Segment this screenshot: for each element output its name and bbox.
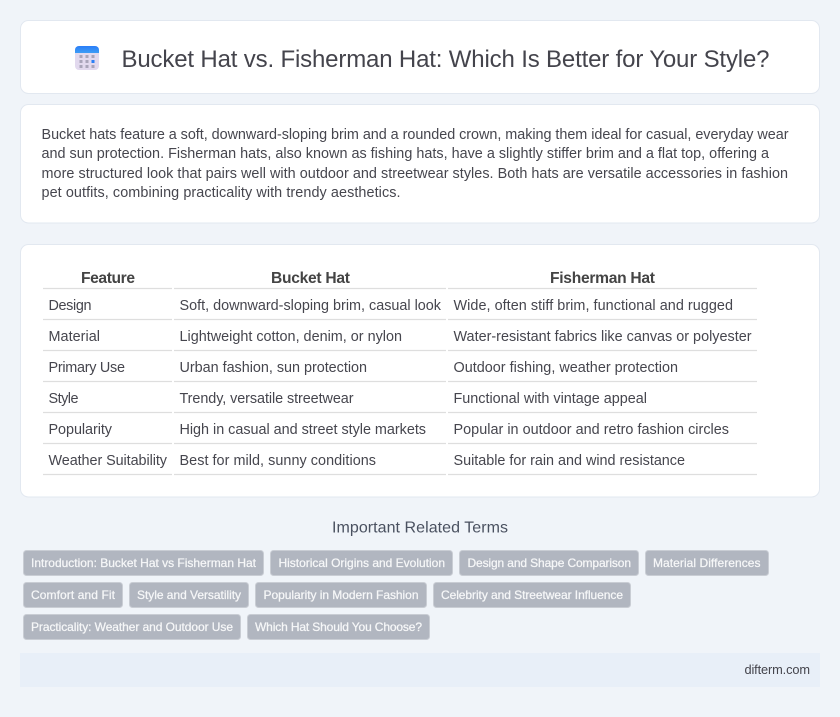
footer [20, 653, 820, 687]
footer site name: difterm.com [744, 662, 810, 677]
tag: style and versatility [130, 582, 248, 608]
panel: comparison table [20, 244, 820, 497]
tag: which hat [248, 614, 430, 640]
tag: popularity in modern fashion: Popularity in Modern Fashion [264, 588, 418, 602]
tag: design and shape: Design and Shape Comparison [468, 556, 631, 570]
tag: celebrity and streetwear [434, 582, 630, 608]
row: primary use: Outdoor fishing, weather protection [454, 360, 678, 376]
row: material [48, 329, 752, 345]
table header: Feature [81, 270, 135, 287]
related terms heading: Important Related Terms [332, 520, 508, 536]
row: style: Style [48, 391, 78, 407]
row: primary use: Primary Use [48, 360, 125, 376]
header panel [20, 20, 820, 94]
title: Bucket Hat vs. Fisherman Hat: Which Is Better for Your Style? [122, 46, 770, 73]
tag: introduction [24, 550, 264, 576]
tag: style and versatility: Style and Versatility [137, 588, 241, 602]
row: design: Design [48, 298, 92, 314]
row: weather suitability: Weather Suitability [48, 453, 168, 469]
tag: comfort and fit: Comfort and Fit [31, 588, 116, 602]
row: popularity: Popularity [48, 422, 113, 438]
row: primary use: Urban fashion, sun protection [180, 360, 367, 376]
row: primary use [48, 360, 678, 376]
tag: practicality: Practicality: Weather and Outdoor Use [31, 620, 233, 634]
table header [81, 270, 655, 287]
row: weather suitability: Suitable for rain and wind resistance [454, 453, 685, 469]
panel: intro paragraph [20, 104, 820, 223]
intro text: Bucket hats feature a soft, downward-sloping brim and a rounded crown, making them ideal for casual, everyday wear [42, 127, 789, 143]
row: style: Trendy, versatile streetwear [180, 391, 354, 407]
row: style [48, 391, 647, 407]
tag: design and shape [460, 550, 638, 576]
tag: which hat: Which Hat Should You Choose? [255, 620, 422, 634]
intro text [42, 127, 789, 201]
tag: comfort and fit [24, 582, 122, 608]
tag: historical origins [270, 550, 452, 576]
row: weather suitability [48, 453, 685, 469]
row: popularity: Popular in outdoor and retro fashion circles [454, 422, 729, 438]
row: style: Functional with vintage appeal [454, 391, 647, 407]
row: popularity: High in casual and street style markets [180, 422, 426, 438]
tag: practicality [24, 614, 240, 640]
tag: celebrity and streetwear: Celebrity and Streetwear Influence [441, 588, 623, 602]
tag: historical origins: Historical Origins and Evolution [278, 556, 445, 570]
tag: material differences [646, 550, 768, 576]
row: design: Soft, downward-sloping brim, casual look [180, 298, 442, 314]
row: material: Material [48, 329, 100, 345]
tag: popularity in modern fashion [256, 582, 426, 608]
row: design: Wide, often stiff brim, functional and rugged [454, 298, 733, 314]
intro text: and sun protection. Fisherman hats, also known as fishing hats, have a slightly stiffer brim and a flat top, offering a [42, 146, 769, 162]
table header: Fisherman Hat [550, 270, 655, 287]
tag: introduction: Introduction: Bucket Hat vs Fisherman Hat [31, 556, 257, 570]
tag: material differences: Material Differences [653, 556, 760, 570]
related terms tags [24, 550, 768, 640]
row: weather suitability: Best for mild, sunny conditions [180, 453, 376, 469]
row: popularity [48, 422, 729, 438]
table header: Bucket Hat [271, 270, 350, 287]
intro text: more structured look that pairs well with outdoor and streetwear styles. Both hats are versatile accessories in fashion [42, 166, 788, 182]
row: material: Water-resistant fabrics like canvas or polyester [454, 329, 752, 345]
row: design [48, 298, 733, 314]
row: material: Lightweight cotton, denim, or nylon [180, 329, 402, 345]
icon: calendar [75, 46, 99, 70]
intro text: pet outfits, combining practicality with trendy aesthetics. [42, 185, 400, 201]
